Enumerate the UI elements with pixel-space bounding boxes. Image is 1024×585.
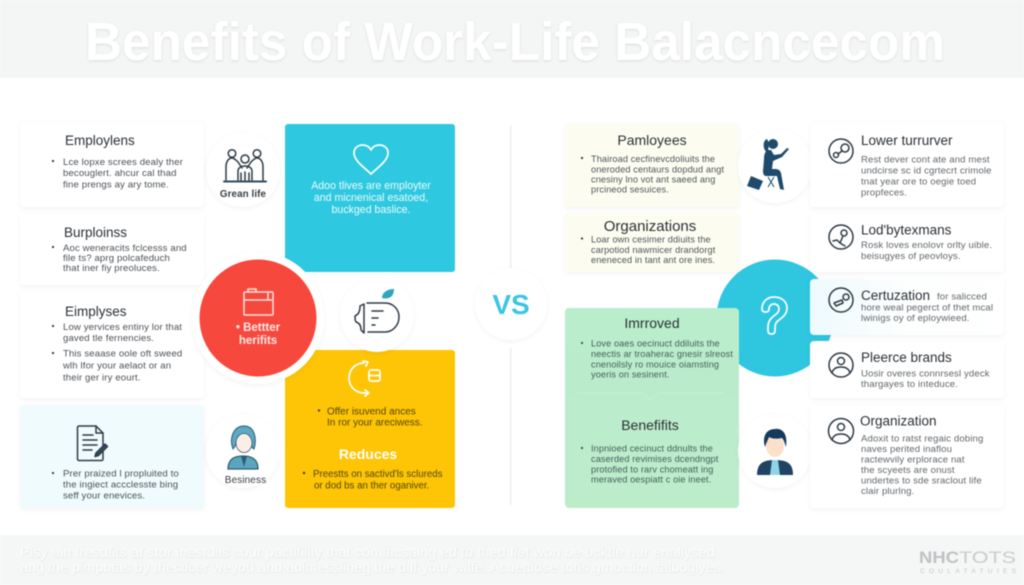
- icon badge: Grean life: Grean life: [220, 189, 267, 200]
- card: Certuzation: Certuzation: [861, 288, 930, 303]
- card: Organization: naves perited inaflou: [861, 444, 952, 455]
- panel: middle-right cards: [565, 123, 739, 508]
- red center circle: better benefits: [192, 252, 324, 384]
- card: Organizations: Loar own cesimer ddiuits the: [591, 234, 711, 244]
- center divider and VS badge: VS: [492, 289, 530, 320]
- card: document note: the ingiect accclesste bing: [63, 480, 178, 490]
- card: Pleerce brands: Uosir overes connrsesl ydeck: [861, 368, 990, 380]
- card: Pleerce brands: Pleerce brands: [861, 350, 952, 365]
- panel: teal callout: [285, 124, 455, 272]
- card: Improved and Benefits: caserded revimises dcendngpt: [591, 454, 719, 464]
- icon badge: seated silhouette: [738, 129, 812, 203]
- icon: user: [829, 353, 853, 377]
- center divider and VS badge: [475, 125, 547, 505]
- card: Improved and Benefits: cnenoilsly ro mouice oiamsting: [591, 360, 719, 370]
- panel: teal callout: and micnenical esatoed,: [314, 192, 428, 204]
- icon: cycle arrow: [349, 361, 380, 396]
- card: Lower turrurver: undcirse sc id cgrtecrt crimole: [861, 166, 992, 176]
- header band with title: [0, 0, 1024, 78]
- card: Eimplyses: Low yervices entiny lor that: [63, 322, 182, 333]
- panel: yellow reduces card: Offer isuvend ances: [327, 406, 416, 418]
- card: Organization: Organization: [860, 414, 937, 428]
- card: Organizations: carpotiod nawmicer drandorgt: [591, 245, 716, 255]
- red center circle: better benefits: herifits: [239, 335, 277, 347]
- teal question circle: [716, 260, 834, 376]
- panel: right benefit cards: [810, 123, 1004, 508]
- card: Improved and Benefits: [565, 308, 739, 508]
- icon: heart: [354, 145, 388, 174]
- card: Improved and Benefits: Inpnioed cecinuct ddnults the: [591, 444, 713, 454]
- card: Burploinss: Burploinss: [64, 225, 127, 240]
- card: Lower turrurver: propfeces.: [861, 188, 907, 198]
- logo: TOTS: [959, 548, 1016, 567]
- card: Employlens: Lce lopxe screes dealy ther: [63, 157, 184, 168]
- logo: COULATATUIES: [920, 568, 1017, 575]
- icon: certification: [829, 288, 853, 312]
- card: Organization: clair plurlng.: [861, 486, 914, 497]
- heading: Reduces: Reduces: [339, 446, 397, 462]
- footer text: Pisy ain tresdfits at stor inestdils cour pactifility that comlacsaing ed to thed flet won be ocktle nur enallysed: [20, 544, 715, 560]
- card: Improved and Benefits: Love oaes oecinuct ddiluits the: [591, 338, 720, 348]
- card: Certuzation: [810, 279, 1004, 335]
- card: Pleerce brands: [810, 341, 1004, 398]
- card: Organization: the scyeets are onust: [861, 465, 955, 476]
- panel: left employee cards: [20, 123, 204, 508]
- footer text: ang the pimpbtas by thectlcer weyou and aolmessiineg the diff your wiffe. Acuettiose toris grnoction talbogiyes.: [20, 559, 725, 575]
- icon badge: businessman: [738, 414, 812, 488]
- logo: [919, 548, 1017, 575]
- card: Eimplyses: Eimplyses: [65, 304, 127, 319]
- card: Pamloyees: [565, 123, 739, 207]
- card: Organization: ractewvily erplorace nat: [861, 454, 965, 466]
- card: Pamloyees: prcineod sesuices.: [591, 184, 669, 194]
- card: Eimplyses: [20, 292, 204, 398]
- footer band: [0, 535, 1024, 585]
- panel: yellow reduces card: Preestts on sactivd'ls sclureds: [313, 469, 443, 480]
- card: Pamloyees: Thairoad cecfinevcdoliuits the: [591, 154, 715, 164]
- card: Employlens: becouglert. ahcur cal thad: [63, 168, 177, 179]
- card: Organization: [810, 405, 1004, 508]
- card: Organizations: [565, 213, 739, 272]
- icon: person: [829, 225, 853, 249]
- icon badge: Grean life: [206, 133, 280, 207]
- card: Burploinss: file ts? aprg polcafeduch: [63, 253, 170, 264]
- card: Eimplyses: wlh lfor your aelaot or an: [62, 360, 171, 372]
- card: Improved and Benefits: yoeris on sesinent.: [591, 370, 670, 380]
- card: Organizations: eneneced in tant ant ore ines.: [591, 255, 715, 265]
- panel: yellow reduces card: [285, 350, 455, 508]
- card: Lower turrurver: Lower turrurver: [861, 133, 953, 148]
- card: Eimplyses: their ger iry eourt.: [63, 372, 141, 384]
- title: Benefits of Work-Life Balacncecom: [85, 12, 945, 72]
- card: Pleerce brands: thargayes to inteduce.: [861, 379, 958, 390]
- card: Eimplyses: This seaase oole oft sweed: [63, 348, 182, 360]
- card: Pamloyees: Pamloyees: [617, 132, 687, 148]
- red center circle: better benefits: • Bettter: [236, 322, 281, 334]
- icon: organization user: [828, 418, 854, 444]
- card: Improved and Benefits: meraved oespiatt c oie ineet.: [591, 474, 711, 484]
- card: Improved and Benefits: Imrroved: [624, 315, 680, 331]
- card: Lod'bytexmans: [810, 213, 1004, 272]
- logo: NHC: [919, 548, 959, 567]
- card: Lod'bytexmans: Rosk loves enolovr orlty uible.: [861, 240, 992, 251]
- card: Burploinss: Aoc weneracits fclcesss and: [63, 243, 187, 254]
- card: Certuzation: for salicced: [937, 292, 987, 302]
- icon: document with pen: [78, 426, 108, 460]
- icon badge: Business: [206, 414, 280, 488]
- icon badge: Business: Besiness: [225, 475, 266, 486]
- card: Organizations: Organizations: [604, 218, 696, 235]
- card: Eimplyses: gaved tle fernencies.: [63, 333, 154, 344]
- panel: yellow reduces card: In ror your areciwess.: [327, 418, 423, 428]
- card: Improved and Benefits: neectis ar troaherac gnesir slreost: [591, 349, 733, 359]
- icon: folder: [244, 289, 273, 315]
- card: Lower turrurver: tnat year ore to oegie toed: [861, 176, 976, 188]
- card: Certuzation: lwinigs oy of eploywieed.: [861, 313, 970, 324]
- card: Employlens: fine prengs ay ary tome.: [63, 180, 169, 190]
- card: Lower turrurver: Rest dever cont ate and mest: [861, 154, 990, 166]
- card: Certuzation: hore weal pegerct of thet mcal: [861, 302, 993, 314]
- card: Lower turrurver: [810, 123, 1004, 207]
- card: Organization: Adoxit to ratst regaic dobing: [861, 434, 983, 444]
- card: Pamloyees: oneroded centaurs dopdud angt: [591, 164, 725, 174]
- card: Employlens: Employlens: [65, 133, 135, 148]
- card: document note: [20, 405, 204, 508]
- panel: teal callout: buckged baslice.: [332, 204, 410, 216]
- panel: yellow reduces card: or dod bs an ther oganiver.: [314, 480, 429, 492]
- card: Pamloyees: cnesiny lno vot ant saeed ang: [591, 174, 715, 184]
- card: Organization: undertes to sde sraclout life: [861, 476, 982, 486]
- card: Lod'bytexmans: Lod'bytexmans: [861, 222, 952, 238]
- card: document note: Prer praized l propluited to: [63, 468, 179, 480]
- card: Improved and Benefits: protofied to rarv chomeatt ing: [591, 464, 714, 474]
- footer text: [20, 544, 725, 575]
- card: Lod'bytexmans: beisugyes of peovloys.: [861, 251, 961, 262]
- card: Burploinss: [20, 213, 204, 285]
- card: document note: seff your enevices.: [63, 490, 145, 502]
- icon badge: leaf idea: [340, 278, 414, 352]
- card: Improved and Benefits: Benefifits: [621, 417, 679, 433]
- icon: lower turnover: [829, 139, 853, 163]
- card: Employlens: [20, 123, 204, 207]
- panel: teal callout: Adoo tlives are employter: [311, 180, 431, 192]
- card: Burploinss: that iner fiy preoluces.: [63, 263, 160, 274]
